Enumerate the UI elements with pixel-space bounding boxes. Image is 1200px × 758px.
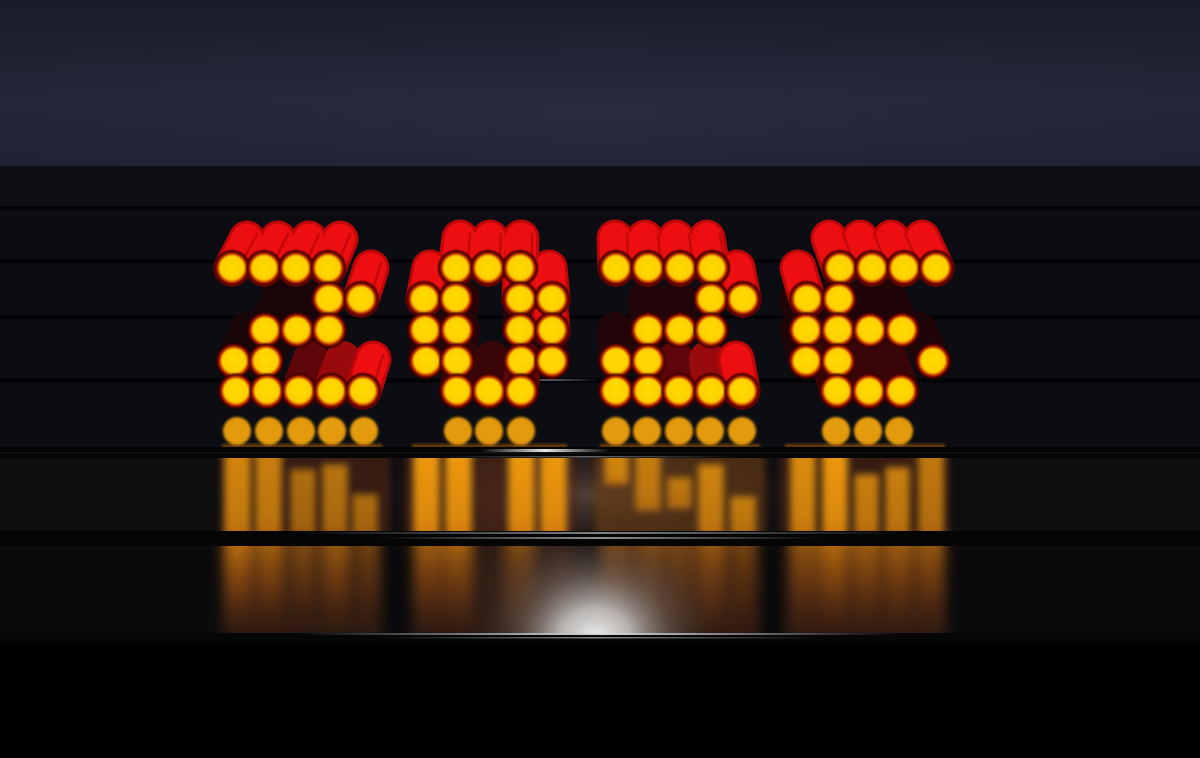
digit 5 faces: [788, 250, 954, 409]
reflection: lower band columns: [214, 546, 954, 633]
glossy step edges: [0, 379, 1200, 641]
reflection: middle band columns: [217, 458, 953, 531]
digit 2 faces: [214, 250, 381, 409]
bright tubes: [232, 234, 936, 391]
back wall: [0, 0, 1200, 167]
stepped dark floor: [0, 166, 1200, 758]
digits 2025: [214, 234, 954, 409]
shaded rear tubes: [234, 298, 933, 361]
digit 0 faces: [406, 250, 570, 409]
digit 2 faces (second): [598, 250, 761, 409]
mid-lit tubes: [299, 359, 901, 391]
reflection: upper row of dots: [222, 417, 945, 448]
